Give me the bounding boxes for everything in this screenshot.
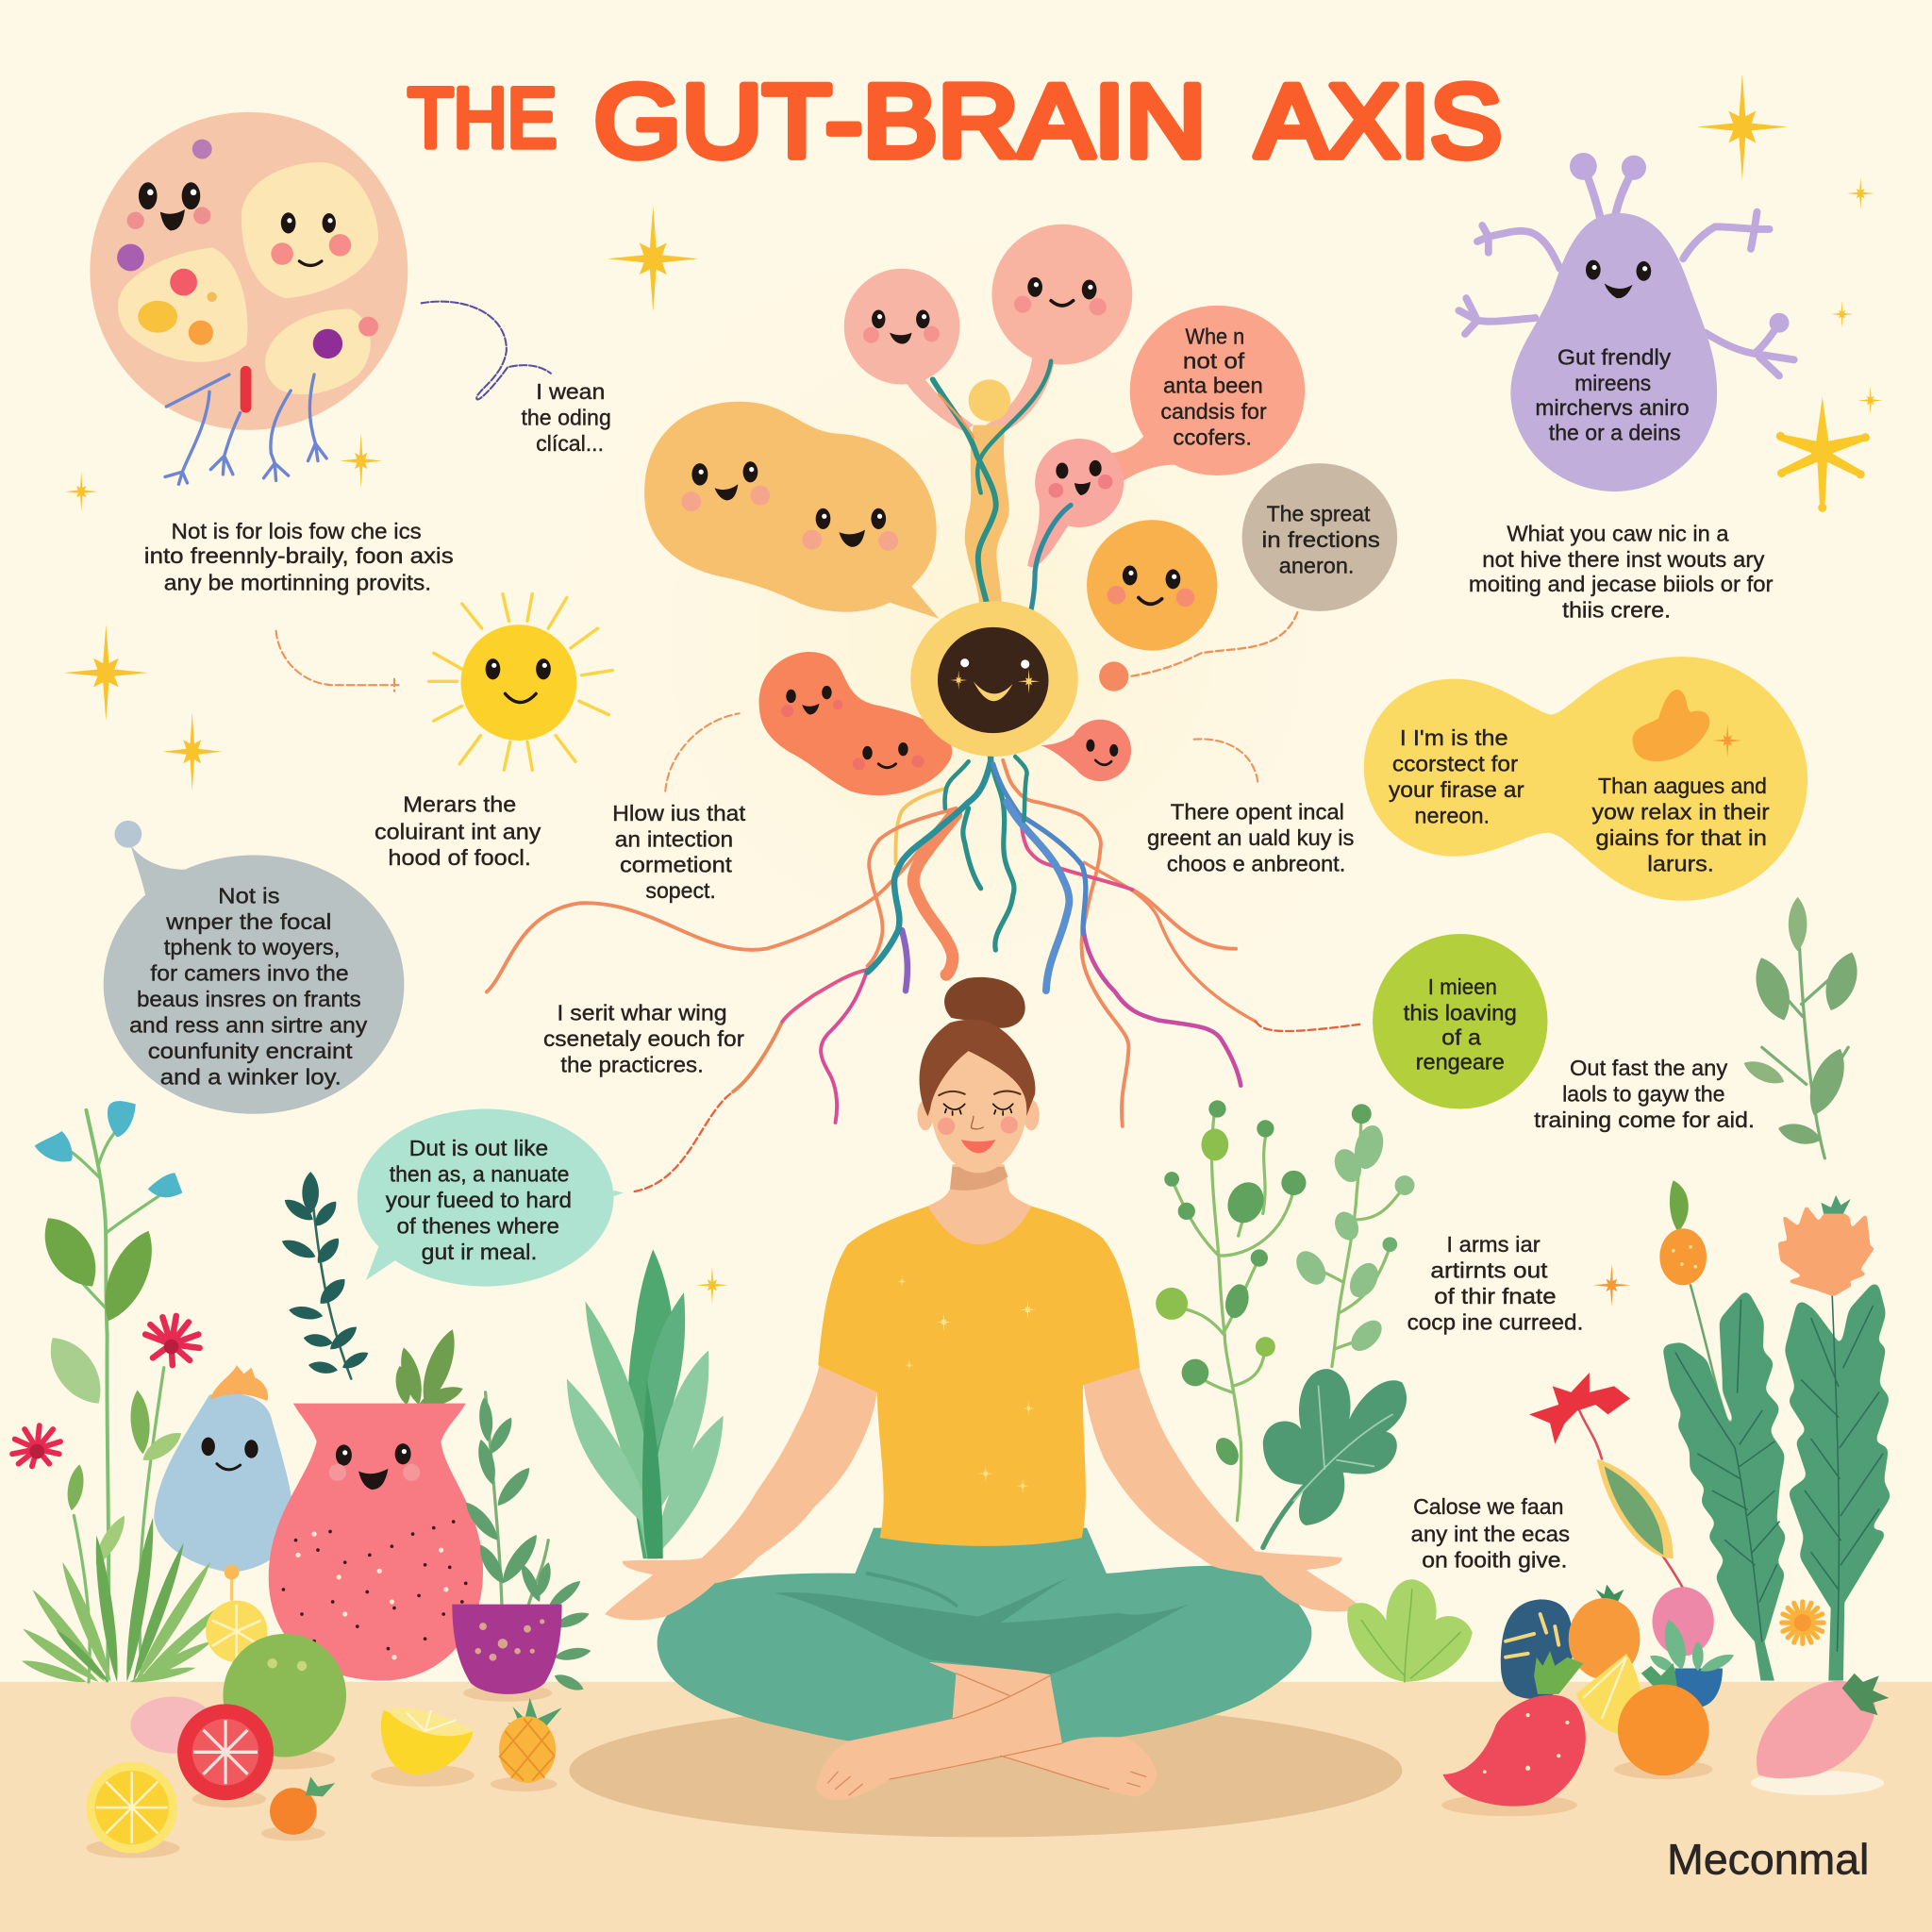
dot xyxy=(1099,661,1128,691)
shirt sparkles xyxy=(897,1275,1036,1494)
text: What you: moiting and jecase biiols or for xyxy=(1469,572,1774,596)
fruit: red strawberry melon xyxy=(1442,1651,1586,1807)
panel: coral two-face blob xyxy=(759,652,952,795)
panel: gray bubble: counfunity encraint xyxy=(148,1039,353,1063)
text: There opent: greent an uald kuy is xyxy=(1147,825,1354,850)
panel: purple microbe: mireens xyxy=(1574,371,1651,395)
fruit: lemon slice xyxy=(86,1762,177,1853)
flower: peach xyxy=(1779,1195,1873,1295)
panel: gray bubble: Not is xyxy=(218,883,279,908)
small orange tadpole xyxy=(1041,720,1131,781)
panel: pink bubble 2 xyxy=(986,225,1132,434)
panel: gray bubble: wnper the focal xyxy=(165,909,331,934)
neck shadow xyxy=(950,1167,1008,1191)
icon: sun xyxy=(429,594,612,770)
microbe face: top left xyxy=(127,182,210,230)
text: I serit: the practicres. xyxy=(560,1052,704,1076)
bun xyxy=(944,977,1025,1028)
fruit: carrot orange xyxy=(1569,1585,1640,1679)
text: intro left xyxy=(144,519,454,595)
text: What you xyxy=(1469,521,1774,622)
text: I serit xyxy=(543,1000,744,1076)
panel: taupe circle xyxy=(1242,463,1397,611)
panel: lime circle: rengeare xyxy=(1416,1050,1505,1074)
floor xyxy=(0,1682,1932,1932)
character: blue drop xyxy=(154,1365,293,1573)
pants shading xyxy=(774,1577,1189,1674)
text: intro left: into freennly-braily, foon axis xyxy=(144,543,454,568)
panel: yellow double bubble: larurs. xyxy=(1647,851,1714,875)
microbe face: top right xyxy=(271,212,351,265)
panel: gray bubble: beaus insres on frants xyxy=(137,987,361,1011)
panel: teal speech bubble xyxy=(358,1109,624,1287)
panel: lime circle xyxy=(1373,934,1547,1109)
text: I wean note: clícal... xyxy=(536,431,604,456)
panel: teal speech bubble: then as, a nanuate xyxy=(390,1162,569,1187)
text: Hlow: sopect. xyxy=(645,878,716,903)
fruit: lemon half xyxy=(381,1707,474,1774)
text: I arms: artirnts out xyxy=(1430,1257,1548,1282)
plant: red sprig and yellow leaf xyxy=(1529,1373,1683,1589)
panel: yellow double bubble: yow relax in their xyxy=(1592,800,1770,824)
text: I arms: of thir fnate xyxy=(1434,1284,1557,1308)
panel: gray bubble: for camers invo the xyxy=(150,961,349,986)
panel: gray bubble: and a winker loy. xyxy=(160,1064,341,1089)
star: large bright xyxy=(1776,397,1870,512)
icon: orange hand shape xyxy=(1633,690,1709,761)
panel: yellow double bubble: Than aagues and xyxy=(1598,774,1767,798)
panel: purple microbe: mirchervs aniro xyxy=(1535,395,1690,420)
nerve strands: above hub xyxy=(933,361,1071,633)
text: Calose xyxy=(1411,1494,1570,1572)
fruit: plate and pink fruit xyxy=(1751,1674,1889,1795)
title: THE xyxy=(408,71,557,164)
text: I wean note: the oding xyxy=(521,406,611,430)
facial features xyxy=(938,1091,1020,1154)
panel: gray bubble xyxy=(104,821,404,1114)
flower: small orange xyxy=(1782,1602,1824,1643)
panel: purple microbe xyxy=(1458,153,1794,491)
fruit: grapefruit xyxy=(177,1704,274,1800)
fruit: pink xyxy=(1653,1587,1714,1656)
plant: right tall leaves and flower xyxy=(1666,1195,1888,1681)
panel: yellow double bubble: your firase ar xyxy=(1389,777,1524,802)
panel: yellow double bubble xyxy=(1364,657,1807,901)
plant: purple pot xyxy=(452,1392,591,1702)
text: Out fast xyxy=(1534,1056,1755,1132)
floor shadow xyxy=(569,1704,1402,1837)
plant: grass tuft xyxy=(20,1517,228,1687)
text: I serit: I serit whar wing xyxy=(557,1000,727,1024)
right arm and hand xyxy=(1083,1365,1360,1611)
fruits: bottom right xyxy=(1441,1585,1889,1816)
spine and head node xyxy=(965,379,1010,610)
text: Calose: on fooith give. xyxy=(1422,1547,1567,1572)
dashed connector: taupe to dot xyxy=(1130,612,1297,676)
panel: yellow double bubble: ccorstect for xyxy=(1392,752,1519,776)
text: Hlow: cormetiont xyxy=(620,853,733,877)
panel: yellow double bubble: giains for that in xyxy=(1595,825,1767,850)
panel: salmon text bubble with small pink face: not of xyxy=(1183,349,1245,374)
fruit: lemon wedge xyxy=(1576,1654,1642,1739)
text: Hlow xyxy=(612,801,746,903)
panel: salmon text bubble with small pink face: Whe n xyxy=(1185,324,1244,348)
text: What you: Whiat you caw nic in a xyxy=(1507,521,1729,545)
panel: teal speech bubble: of thenes where xyxy=(397,1213,559,1238)
text: Hlow: Hlow ius that xyxy=(612,801,746,825)
text: intro left: any be mortinning provits. xyxy=(164,571,431,595)
panel: teal speech bubble: your fueed to hard xyxy=(386,1188,572,1212)
panel: brain hub xyxy=(910,601,1078,757)
fruit: orange xyxy=(1618,1663,1709,1775)
flower: red top xyxy=(145,1316,200,1365)
plant: orange berry xyxy=(1659,1180,1707,1285)
fruit: pineapple xyxy=(499,1698,562,1783)
shirt xyxy=(818,1207,1140,1546)
plant: lime leaf xyxy=(1347,1579,1473,1682)
dashed connector: gut to note xyxy=(422,302,551,399)
stars: upper left and centre xyxy=(64,206,728,1304)
title: AXIS xyxy=(1256,64,1502,179)
nerve strands: below hub xyxy=(487,733,1363,1191)
plant: vine 1 xyxy=(1156,1100,1306,1521)
panel: pink bubble 1 xyxy=(844,269,974,431)
panel: taupe circle: aneron. xyxy=(1279,553,1354,577)
text: There opent xyxy=(1147,800,1354,875)
vase leaves xyxy=(393,1325,465,1411)
fruit: small orange xyxy=(270,1776,335,1835)
fruit: pink blob xyxy=(130,1697,214,1754)
plant: oak leaf xyxy=(1263,1369,1407,1547)
text: Merars: Merars the xyxy=(403,792,516,817)
text: I serit: csenetaly eouch for xyxy=(543,1026,744,1051)
text: intro left: Not is for lois fow che ics xyxy=(172,519,422,543)
text: Out fast: Out fast the any xyxy=(1570,1056,1728,1080)
panel: salmon text bubble with small pink face: candsis for xyxy=(1160,399,1267,424)
title xyxy=(408,64,1502,179)
panel: gut circle with microbes xyxy=(90,112,408,484)
leaf: left tall xyxy=(1666,1293,1783,1681)
text: There opent: choos e anbreont. xyxy=(1167,851,1345,875)
text: Calose: Calose we faan xyxy=(1413,1494,1563,1519)
panel: salmon text bubble with small pink face: ccofers. xyxy=(1173,425,1252,450)
text: I arms xyxy=(1407,1232,1583,1334)
left arm and hand xyxy=(605,1365,877,1620)
panel: lime circle: of a xyxy=(1441,1025,1481,1050)
star: orange xyxy=(1593,1264,1630,1306)
microbe legs xyxy=(165,375,326,484)
panel: lime circle: I mieen xyxy=(1428,974,1497,999)
vase character xyxy=(269,1325,483,1681)
panel: taupe circle: in frections xyxy=(1261,527,1380,552)
plant: aloe centre-left xyxy=(567,1249,724,1558)
text: Calose: any int the ecas xyxy=(1411,1522,1570,1546)
panel: salmon text bubble with small pink face: anta been xyxy=(1163,374,1263,398)
ears xyxy=(917,1100,1040,1130)
plant: dark sprig xyxy=(279,1172,371,1379)
crossed feet xyxy=(816,1662,1157,1800)
panel: gray bubble: tphenk to woyers, xyxy=(164,935,340,959)
flower: red bottom xyxy=(12,1425,60,1466)
panel: taupe circle: The spreat xyxy=(1267,501,1371,525)
leaf: right tall xyxy=(1788,1285,1888,1681)
text: I arms: cocp ine curreed. xyxy=(1407,1309,1583,1334)
brand wordmark: Meconmal xyxy=(1667,1836,1869,1884)
panel: yellow double bubble: nereon. xyxy=(1414,803,1490,827)
text: Out fast: training come for aid. xyxy=(1534,1108,1755,1132)
panel: purple microbe: Gut frendly xyxy=(1557,345,1672,370)
pants xyxy=(658,1528,1311,1743)
neck and chest xyxy=(924,1164,1035,1249)
text: Hlow: an intection xyxy=(615,826,733,851)
fruit: navy striped xyxy=(1501,1599,1573,1699)
text: I wean note: I wean xyxy=(536,379,605,404)
stars: upper right xyxy=(1697,74,1883,415)
text: I arms: I arms iar xyxy=(1446,1232,1541,1257)
text: Out fast: laols to gayw the xyxy=(1562,1082,1725,1107)
leg contour lines xyxy=(828,1674,1146,1795)
plant: succulent pot xyxy=(1647,1617,1736,1707)
panel: teal speech bubble: Dut is out like xyxy=(409,1136,548,1160)
fruits: bottom left xyxy=(86,1634,562,1858)
hair xyxy=(920,1020,1035,1116)
text: Merars: coluirant int any xyxy=(375,819,541,843)
panel: gray bubble: and ress ann sirtre any xyxy=(129,1013,368,1038)
panel: large orange two-face bubble xyxy=(644,402,939,619)
plant: vine 2 xyxy=(1291,1104,1414,1366)
panel: yellow double bubble: I I'm is the xyxy=(1400,725,1508,750)
text: What you: not hive there inst wouts ary xyxy=(1482,547,1765,572)
panel: salmon text bubble with small pink face xyxy=(1027,306,1305,567)
pants wrinkle xyxy=(868,1574,957,1606)
panel: purple microbe: the or a deins xyxy=(1549,420,1681,444)
title: GUT-BRAIN xyxy=(594,64,1207,179)
panel: lime circle: this loaving xyxy=(1404,1000,1517,1024)
plant: upper right sprig xyxy=(1740,897,1865,1158)
fruit: lemon slice behind xyxy=(206,1565,267,1662)
face xyxy=(930,1047,1026,1173)
panel: orange circle face xyxy=(1087,520,1217,651)
text: I wean note xyxy=(521,379,611,456)
text: Merars xyxy=(375,792,541,870)
text: There opent: There opent incal xyxy=(1171,800,1344,824)
fruit: green melon xyxy=(223,1634,346,1757)
panel: teal speech bubble: gut ir meal. xyxy=(422,1240,537,1264)
text: What you: thiis crere. xyxy=(1562,597,1671,622)
plant: left flowers xyxy=(12,1101,200,1682)
dashed connector: sun xyxy=(276,631,399,691)
text: Merars: hood of foocl. xyxy=(388,845,531,870)
figure: meditating woman xyxy=(569,977,1402,1837)
